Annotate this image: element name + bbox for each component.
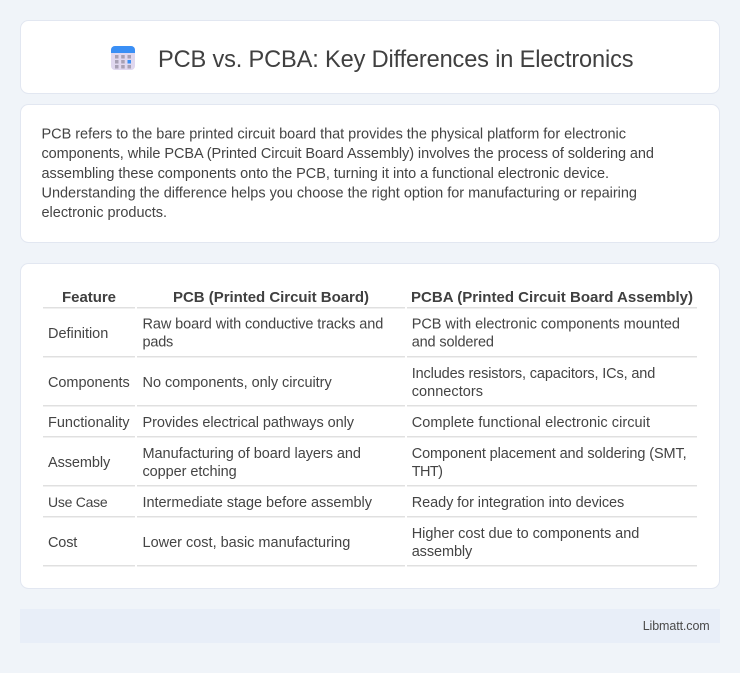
footer credit: Libmatt.com [643,619,710,633]
table row: assembly: THT) [412,464,443,480]
panel: header [20,20,720,94]
text block: introduction paragraph: electronic products. [42,205,167,221]
table row: functionality: Complete functional electronic circuit [412,415,650,431]
table row: components: Includes resistors, capacitors, ICs, and [412,366,655,382]
table row: definition: Definition [48,326,108,342]
table row: definition: PCB with electronic components mounted [412,316,680,332]
table row: functionality: Functionality [48,415,130,431]
text block: introduction paragraph [42,127,654,221]
table row: components [43,366,697,406]
table row: assembly: copper etching [142,464,237,480]
table header row: Feature [62,289,116,306]
table row: functionality: Provides electrical pathways only [142,415,355,431]
table row: assembly [43,446,697,486]
table row: cost [43,526,697,566]
table row: use case: Ready for integration into devices [412,495,624,511]
title: PCB vs. PCBA: Key Differences in Electronics [158,47,634,73]
table row: assembly: Manufacturing of board layers and [142,446,361,462]
table row: components: connectors [412,384,483,400]
table row: cost: Higher cost due to components and [412,526,639,542]
table row: definition: Raw board with conductive tracks and [142,316,383,332]
table row: cost: Lower cost, basic manufacturing [142,535,350,551]
table row: assembly: Assembly [48,455,111,471]
table header row: PCBA (Printed Circuit Board Assembly) [411,289,693,306]
text block: introduction paragraph: PCB refers to the bare printed circuit board that provides the physical platform for electronic [42,127,626,143]
table row: definition: and soldered [412,335,494,351]
table header row [43,289,697,308]
table row: components: No components, only circuitry [142,375,332,391]
table row: cost: Cost [48,535,77,551]
table row: definition: pads [142,335,173,351]
panel: introduction [20,104,720,242]
table row: definition [43,316,697,358]
panel: footer [20,609,720,643]
table header row: PCB (Printed Circuit Board) [173,289,369,306]
text block: introduction paragraph: Understanding the difference helps you choose the right option for manufacturing or repairing [42,185,637,201]
table row: use case: Use Case [48,494,108,510]
table row: use case [43,494,697,518]
table row: use case: Intermediate stage before assembly [142,495,373,511]
text block: introduction paragraph: components, while PCBA (Printed Circuit Board Assembly) involves the process of soldering and [42,146,654,162]
table row: components: Components [48,375,130,391]
text block: introduction paragraph: assembling these components onto the PCB, turning it into a functional electronic device. [42,166,609,182]
table row: assembly: Component placement and soldering (SMT, [412,446,687,462]
table row: cost: assembly [412,544,473,560]
panel: comparison table [20,264,720,588]
icon: calendar [111,46,135,70]
table row: functionality [43,415,697,438]
